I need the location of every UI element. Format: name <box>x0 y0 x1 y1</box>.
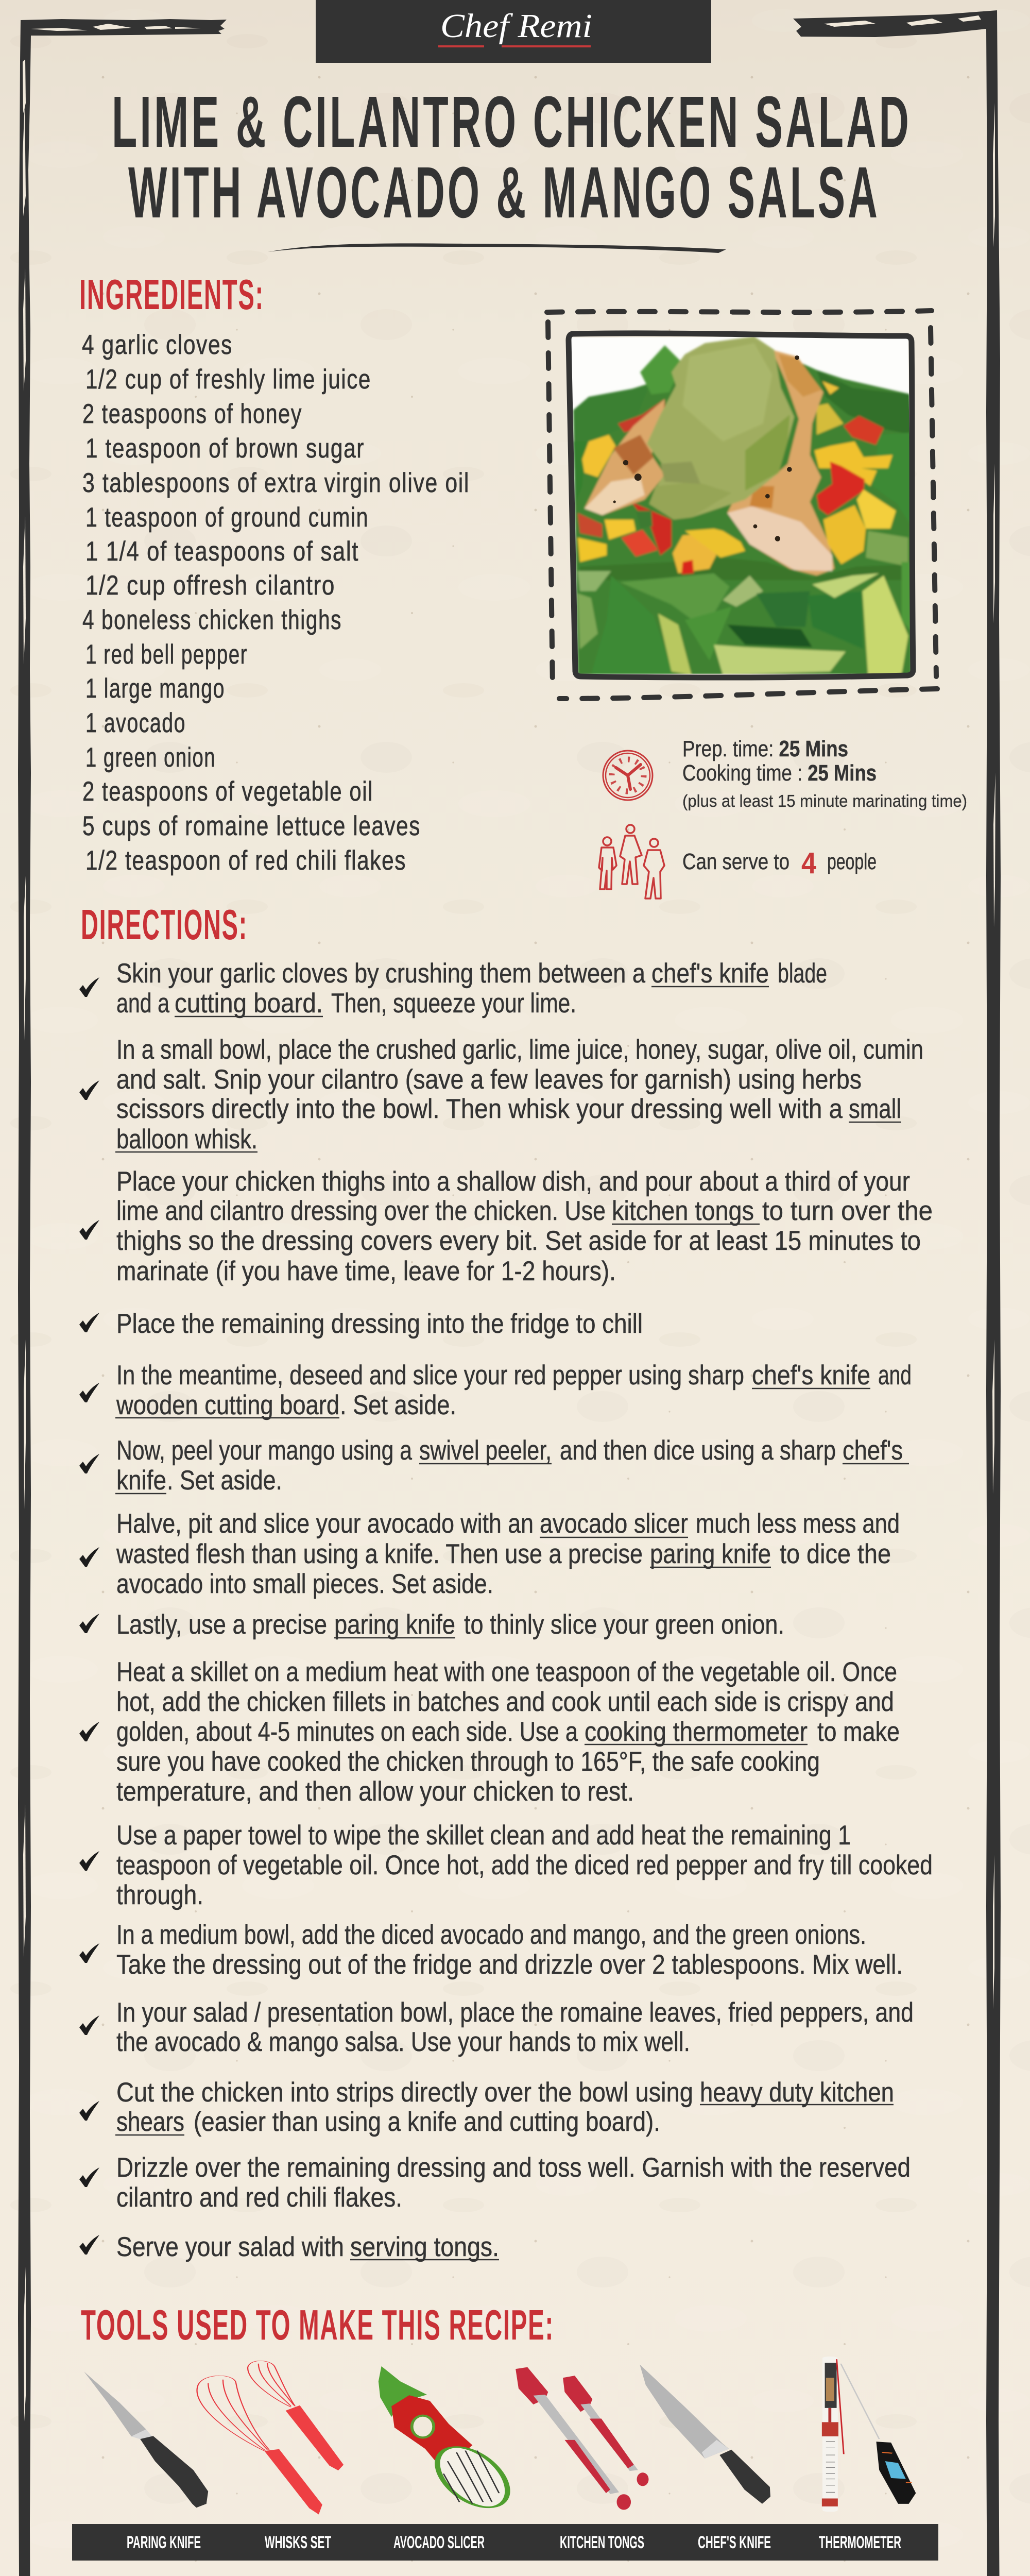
step 5: In the meantime, deseed and slice your red pepper using sharp <box>116 1360 744 1391</box>
step 9: cooking thermometer <box>585 1717 808 1747</box>
icon: whisks set <box>197 2361 344 2514</box>
check mark <box>79 1722 99 1741</box>
tools row one <box>84 2357 916 2514</box>
ingredients list: 1/2 teaspoon of red chili flakes <box>85 845 406 876</box>
ingredients list: 1/2 cup of freshly lime juice <box>85 364 371 395</box>
label bar one: WHISKS SET <box>265 2533 331 2552</box>
step 2: balloon whisk. <box>116 1124 258 1155</box>
photo of salad <box>566 330 917 680</box>
icon: thermometer <box>822 2357 916 2512</box>
step 1: chef's knife <box>651 958 769 989</box>
step 14: cilantro and red chili flakes. <box>116 2182 402 2213</box>
icon: clock <box>603 751 653 800</box>
step 10: Use a paper towel to wipe the skillet clean and add heat the remaining 1 <box>116 1820 851 1851</box>
step 3: lime and cilantro dressing over the chicken. Use <box>116 1196 606 1226</box>
step 9: hot, add the chicken fillets in batches and cook until each side is crispy and <box>116 1687 894 1717</box>
step 3: kitchen tongs <box>612 1196 754 1226</box>
panel: ingredients <box>79 270 470 876</box>
brand script name: Chef Remi <box>440 7 592 45</box>
ingredients list: 1 green onion <box>85 742 216 773</box>
step 13: Cut the chicken into strips directly over the bowl using <box>116 2077 693 2108</box>
step 14 <box>79 2153 911 2213</box>
label bar one: AVOCADO SLICER <box>393 2533 485 2552</box>
step 5 <box>79 1360 912 1420</box>
ingredients list <box>82 330 470 876</box>
ingredients list: 1 avocado <box>85 708 186 738</box>
brand underline <box>438 45 591 47</box>
step 13: shears <box>116 2107 184 2137</box>
ingredients list: 4 boneless chicken thighs <box>82 605 342 635</box>
check mark <box>79 1383 99 1402</box>
step 3: Place your chicken thighs into a shallow dish, and pour about a third of your <box>116 1166 910 1197</box>
step 10 <box>79 1820 933 1910</box>
prep and cooking times <box>682 736 967 810</box>
step 13 <box>79 2077 894 2137</box>
step 3 <box>79 1166 933 1286</box>
ingredients list: 2 teaspoons of vegetable oil <box>82 776 373 807</box>
servings text <box>682 846 877 880</box>
step 7: Halve, pit and slice your avocado with an <box>116 1509 534 1539</box>
icon: chef's knife <box>640 2364 770 2504</box>
step 1: cutting board. <box>175 988 323 1019</box>
icon: kitchen tongs <box>516 2367 648 2510</box>
step 12 <box>79 1997 914 2057</box>
recipe photo with frames <box>547 311 937 699</box>
step 6: and then dice using a sharp <box>560 1435 836 1466</box>
servings number: 4 <box>801 846 816 880</box>
step 15: Serve your salad with <box>116 2232 344 2262</box>
check mark <box>79 2101 99 2121</box>
check mark <box>79 1220 99 1240</box>
prep and cooking times: Prep. time: 25 Mins <box>682 736 848 761</box>
step 11: In a medium bowl, add the diced avocado and mango, and the green onions. <box>116 1920 866 1950</box>
ingredients heading: INGREDIENTS: <box>79 270 264 318</box>
check mark <box>79 2235 99 2255</box>
step 6: . Set aside. <box>167 1465 282 1496</box>
ingredients list: 1 teaspoon of brown sugar <box>85 433 365 464</box>
step 13: (easier than using a knife and cutting board). <box>194 2107 660 2137</box>
step 7: much less mess and <box>696 1509 900 1539</box>
check mark <box>79 1943 99 1963</box>
step 6: knife <box>116 1465 166 1496</box>
step 5: wooden cutting board <box>116 1390 339 1420</box>
step 8: paring knife <box>334 1609 455 1640</box>
tools heading: TOOLS USED TO MAKE THIS RECIPE: <box>81 2301 554 2349</box>
panel: tools <box>72 2301 946 2576</box>
step 12: the avocado & mango salsa. Use your hands to mix well. <box>116 2027 690 2057</box>
step 3: marinate (if you have time, leave for 1-2 hours). <box>116 1256 616 1286</box>
step 7: to dice the <box>780 1539 891 1569</box>
title swoosh <box>268 243 726 253</box>
label bar one <box>72 2524 938 2561</box>
step 8 <box>79 1609 784 1640</box>
step 1: blade <box>778 958 827 989</box>
check mark <box>79 1080 99 1100</box>
panel: directions <box>79 901 933 2262</box>
step 9: sure you have cooked the chicken through to 165°F, the safe cooking <box>116 1747 820 1777</box>
check mark <box>79 1454 99 1473</box>
check mark <box>79 2167 99 2187</box>
label bar one: THERMOMETER <box>819 2533 901 2552</box>
check mark <box>79 977 99 997</box>
dashed outer frame <box>547 311 937 699</box>
step 5: chef's knife <box>752 1360 870 1391</box>
step 6: swivel peeler, <box>419 1435 552 1466</box>
step 6: Now, peel your mango using a <box>116 1435 412 1466</box>
step 2: small <box>849 1094 901 1124</box>
step 15: serving tongs. <box>350 2232 499 2262</box>
step 9: golden, about 4-5 minutes on each side. Use a <box>116 1717 578 1747</box>
solid inner frame <box>569 333 913 677</box>
icon: paring knife <box>84 2371 208 2507</box>
check mark <box>79 1313 99 1332</box>
step 9: temperature, and then allow your chicken to rest. <box>116 1776 634 1807</box>
step 8: Lastly, use a precise <box>116 1609 327 1640</box>
step 7: wasted flesh than using a knife. Then use a precise <box>116 1539 643 1569</box>
step 10: through. <box>116 1880 203 1910</box>
prep and cooking times: (plus at least 15 minute marinating time) <box>682 791 967 810</box>
step 5: and <box>878 1360 912 1391</box>
step 7: avocado slicer <box>540 1509 688 1539</box>
step 2 <box>79 1035 923 1155</box>
step 1: and a <box>116 988 169 1019</box>
ingredients list: 1 large mango <box>85 673 225 704</box>
step 11: Take the dressing out of the fridge and drizzle over 2 tablespoons. Mix well. <box>116 1950 903 1980</box>
check mark <box>79 2015 99 2035</box>
step 9: Heat a skillet on a medium heat with one teaspoon of the vegetable oil. Once <box>116 1657 897 1687</box>
brand banner <box>316 0 711 63</box>
ingredients list: 1/2 cup offresh cilantro <box>85 570 335 601</box>
step 3: thighs so the dressing covers every bit. Set aside for at least 15 minutes to <box>116 1226 921 1256</box>
step 9 <box>79 1657 900 1807</box>
step 8: to thinly slice your green onion. <box>464 1609 784 1640</box>
step 6: chef's <box>843 1435 903 1466</box>
directions heading: DIRECTIONS: <box>81 901 248 948</box>
ingredients list: 4 garlic cloves <box>82 330 233 360</box>
check mark <box>79 1851 99 1871</box>
label bar one: CHEF'S KNIFE <box>698 2533 771 2552</box>
ingredients list: 1 red bell pepper <box>85 639 248 670</box>
label bar one: PARING KNIFE <box>127 2533 201 2552</box>
title <box>112 81 912 233</box>
servings text: people <box>827 849 877 874</box>
step 1: Skin your garlic cloves by crushing them between a <box>116 958 645 989</box>
step 5: . Set aside. <box>340 1390 456 1420</box>
ingredients list: 1 1/4 of teaspoons of salt <box>85 536 359 567</box>
step 4: Place the remaining dressing into the fridge to chill <box>116 1309 643 1339</box>
step 2: and salt. Snip your cilantro (save a few leaves for garnish) using herbs <box>116 1064 862 1095</box>
ingredients list: 5 cups of romaine lettuce leaves <box>82 811 421 841</box>
servings text: Can serve to <box>682 849 789 874</box>
step 13: heavy duty kitchen <box>700 2077 894 2108</box>
step 2: scissors directly into the bowl. Then whisk your dressing well with a <box>116 1094 843 1124</box>
check mark <box>79 1547 99 1567</box>
step 6 <box>79 1435 909 1496</box>
step 7 <box>79 1509 900 1599</box>
icon: three people <box>599 825 664 899</box>
step 14: Drizzle over the remaining dressing and toss well. Garnish with the reserved <box>116 2153 911 2183</box>
icon: avocado slicer <box>379 2366 520 2509</box>
step 7: paring knife <box>650 1539 771 1569</box>
check mark <box>79 1614 99 1633</box>
ingredients list: 2 teaspoons of honey <box>82 399 302 429</box>
ingredients list: 3 tablespoons of extra virgin olive oil <box>82 468 470 498</box>
step 7: avocado into small pieces. Set aside. <box>116 1569 493 1599</box>
prep and cooking times: Cooking time : 25 Mins <box>682 760 877 786</box>
label bar one: KITCHEN TONGS <box>560 2533 644 2552</box>
step 15 <box>79 2232 499 2262</box>
ingredients list: 1 teaspoon of ground cumin <box>85 502 369 533</box>
step 9: to make <box>817 1717 900 1747</box>
step 3: to turn over the <box>762 1196 933 1226</box>
step 1: Then, squeeze your lime. <box>331 988 576 1019</box>
step 1 <box>79 958 827 1019</box>
step 11 <box>79 1920 903 1980</box>
